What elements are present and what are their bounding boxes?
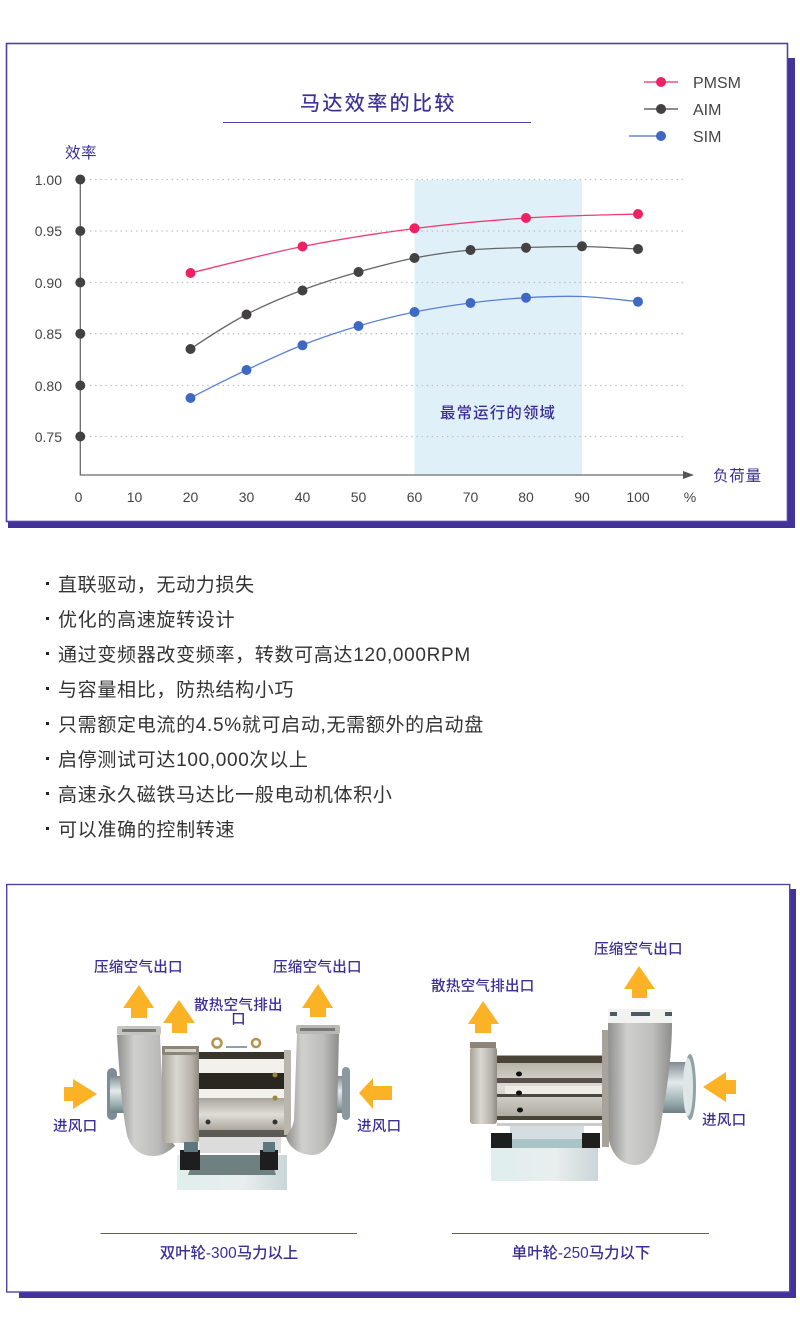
feature list: 直联驱动，无动力损失 [58,574,255,596]
caption: double impeller: 双叶轮-300马力以上 [160,1244,298,1262]
feature list: 优化的高速旋转设计 [58,609,235,631]
feature list: 启停测试可达100,000次以上 [58,749,309,771]
x axis labels [75,489,696,505]
y axis labels: 0.90 [35,275,62,291]
y axis labels: 0.75 [35,429,62,445]
panel: motor types [7,884,796,1298]
labels: double impeller [53,958,401,1135]
labels: single impeller: 散热空气排出口 [431,977,535,995]
series: AIM [186,241,643,354]
feature list: 高速永久磁铁马达比一般电动机体积小 [58,784,393,806]
x axis labels: 90 [574,489,590,505]
x axis labels: 100 [626,489,650,505]
labels: double impeller: 压缩空气出口 [273,958,362,976]
legend: AIM [693,102,721,119]
y axis title: 效率 [65,144,97,162]
x axis title: 负荷量 [713,467,762,485]
labels: double impeller: 进风口 [357,1118,401,1135]
labels: double impeller: 口 [231,1012,246,1028]
x axis labels: 0 [75,489,83,505]
panel: motor efficiency chart [6,44,795,528]
motor photo: double impeller [107,1025,350,1190]
x axis labels: 40 [295,489,310,505]
axes [75,174,694,479]
legend [629,75,741,146]
feature list: 通过变频器改变频率，转数可高达120,000RPM [58,644,471,666]
labels: double impeller: 压缩空气出口 [94,958,183,976]
labels: double impeller: 进风口 [53,1118,97,1135]
x axis labels: 60 [407,489,422,505]
series: PMSM [186,209,643,278]
x axis labels: 30 [239,489,254,505]
arrows: double impeller [64,984,392,1109]
caption: single impeller: 单叶轮-250马力以下 [512,1244,650,1262]
feature list: 可以准确的控制转速 [58,819,235,841]
x axis labels: 80 [518,489,534,505]
x axis labels: 50 [351,489,366,505]
legend: SIM [693,129,721,146]
feature list [46,574,484,841]
y axis labels: 0.95 [35,223,62,239]
highlighted operating region: 最常运行的领域 [440,404,556,422]
labels: single impeller [431,940,746,1129]
feature list: 只需额定电流的4.5%就可启动,无需额外的启动盘 [58,714,484,736]
motor photo: single impeller [470,1009,696,1181]
y axis labels: 1.00 [35,172,62,188]
legend: PMSM [693,75,741,92]
x axis labels: % [684,489,696,505]
labels: double impeller: 散热空气排出 [194,996,283,1014]
arrows: single impeller [468,966,736,1102]
x axis labels: 10 [127,489,142,505]
series: SIM [186,293,643,403]
chart title: 马达效率的比较 [300,92,457,115]
y axis labels: 0.85 [35,326,62,342]
feature list: 与容量相比，防热结构小巧 [58,679,294,701]
labels: single impeller: 进风口 [702,1112,746,1129]
highlighted operating region [414,180,582,475]
x axis labels: 20 [183,489,198,505]
labels: single impeller: 压缩空气出口 [594,940,683,958]
x axis labels: 70 [463,489,478,505]
y axis labels [35,172,62,445]
y axis labels: 0.80 [35,378,62,394]
